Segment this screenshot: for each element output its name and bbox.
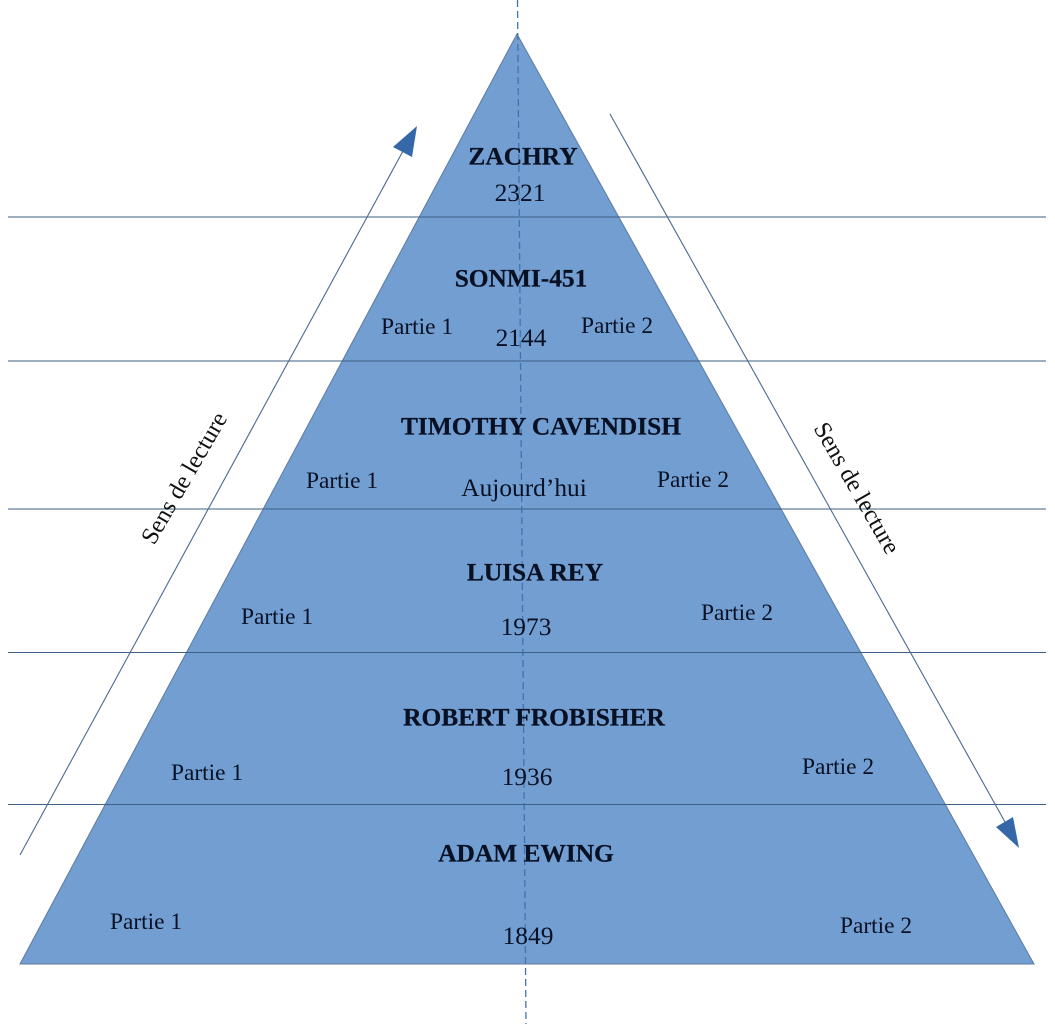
label: right reading direction: Sens de lecture [808,418,905,559]
tier: Robert Frobisher: 1936 [502,763,552,791]
tier: Robert Frobisher [171,704,874,791]
tier: Timothy Cavendish: Partie 2 [657,467,729,493]
label: left reading direction: Sens de lecture [136,408,233,549]
tier: Adam Ewing: Partie 2 [840,913,912,939]
tier: Timothy Cavendish: TIMOTHY CAVENDISH [401,412,681,440]
tier: Sonmi-451 [381,264,653,352]
tier: Timothy Cavendish: Partie 1 [306,468,378,494]
arrow: reading direction upward [20,126,417,855]
tier: Adam Ewing [110,840,912,950]
tier: Sonmi-451: SONMI-451 [455,264,587,292]
central dashed axis [518,0,526,1024]
arrow: reading direction downward [610,114,1019,848]
tier: Sonmi-451: Partie 1 [381,314,453,340]
tier: Luisa Rey [241,558,773,641]
tier: Adam Ewing: 1849 [503,922,553,950]
tier: Robert Frobisher: ROBERT FROBISHER [403,704,666,732]
tier: Luisa Rey: Partie 2 [701,600,773,626]
tier: Zachry: 2321 [495,179,545,207]
tier: Timothy Cavendish: Aujourd’hui [461,474,587,502]
horizontal period separators [8,217,1046,804]
tier: Zachry: ZACHRY [468,142,578,170]
tier: Adam Ewing: ADAM EWING [438,840,614,868]
tier: Adam Ewing: Partie 1 [110,909,182,935]
tier: Sonmi-451: 2144 [496,324,547,352]
tier: Luisa Rey: LUISA REY [467,558,603,586]
tier: Luisa Rey: Partie 1 [241,604,313,630]
tier: Robert Frobisher: Partie 1 [171,760,243,786]
tier: Zachry [468,142,578,207]
tier: Robert Frobisher: Partie 2 [802,754,874,780]
tier: Sonmi-451: Partie 2 [581,313,653,339]
tier: Luisa Rey: 1973 [501,613,551,641]
tier: Timothy Cavendish [306,412,729,502]
